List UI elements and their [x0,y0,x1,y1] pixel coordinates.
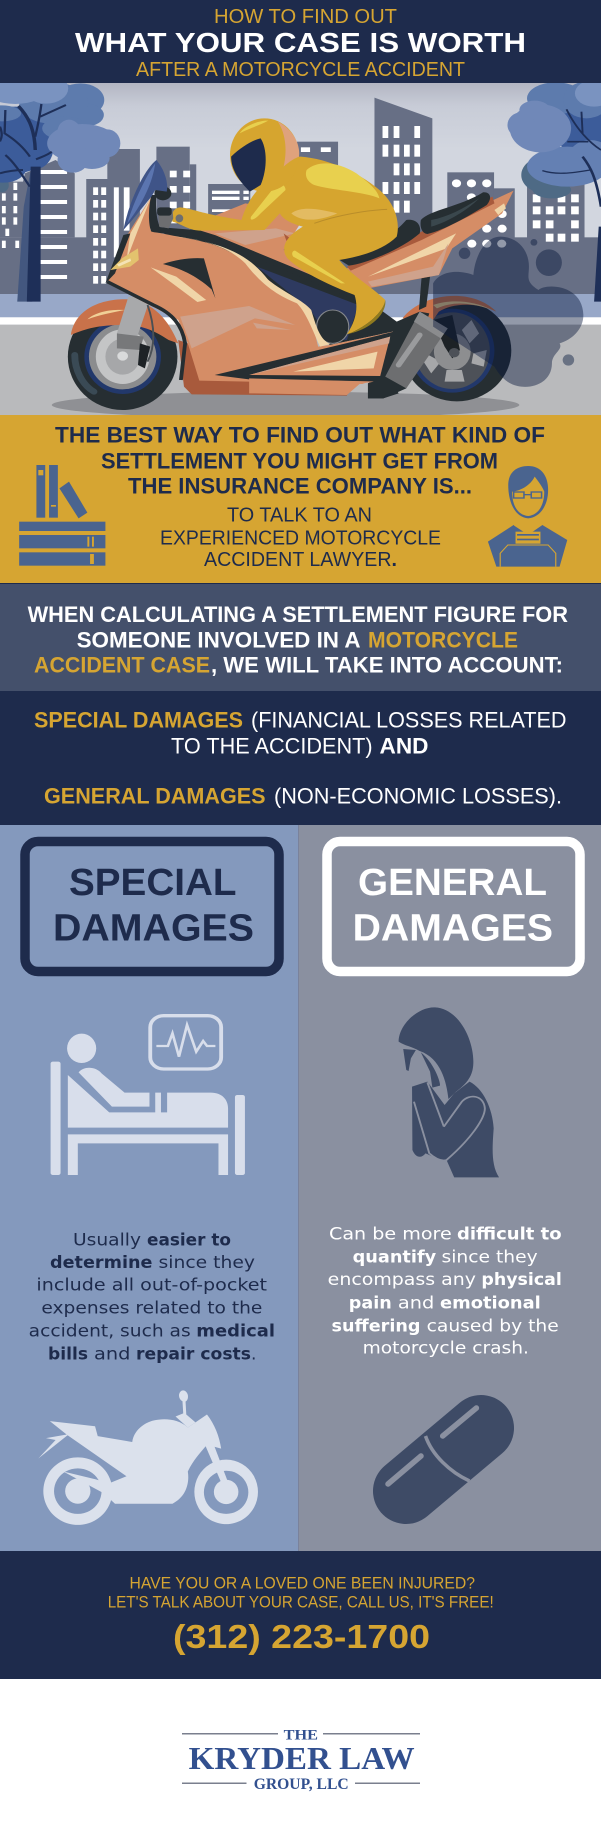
logo: The Kryder Law Group: THE [284,1727,318,1743]
special damages description: expenses related to the [41,1298,262,1318]
special damages description: Usually [73,1230,141,1250]
gold panel answer [160,504,441,571]
headlight [110,248,139,270]
settlement intro text: MOTORCYCLE [368,627,518,652]
street and sidewalk [0,294,601,415]
body highlight [180,306,295,348]
gold panel heading: THE INSURANCE COMPANY IS... [128,473,472,498]
general damages description: and [398,1293,434,1313]
general damages description: encompass any [328,1270,476,1290]
panel: best way to find out [0,415,601,584]
special damages description: include all out-of-pocket [36,1276,267,1296]
icon: books [19,465,105,566]
panel: header [0,0,601,83]
rider [172,118,398,334]
damages summary text: GENERAL DAMAGES [44,783,266,808]
special damages description: easier to [147,1230,231,1250]
general damages description: emotional [440,1293,541,1313]
logo: The Kryder Law Group [182,1727,420,1793]
icon: lawyer [488,466,567,567]
general damages description: motorcycle crash. [363,1339,529,1359]
gold panel heading: THE BEST WAY TO FIND OUT WHAT KIND OF [55,423,545,448]
tree right [507,80,601,302]
rear wheel [412,304,512,402]
special damages description: accident, such as [29,1321,191,1341]
gold panel heading [55,423,545,498]
panel: motorcycle hero illustration [0,73,601,418]
gold panel heading: SETTLEMENT YOU MIGHT GET FROM [101,448,498,473]
engine dark area [153,227,429,398]
gold panel answer: EXPERIENCED MOTORCYCLE [160,526,441,549]
front wheel [68,325,178,410]
general damages heading box: DAMAGES [353,908,553,950]
icon: motorcycle silhouette [38,1390,258,1525]
panel: special damages [0,825,298,1551]
settlement intro text: WHEN CALCULATING A SETTLEMENT FIGURE FOR [28,602,568,627]
smoke puffs [459,239,574,366]
special damages description [29,1230,275,1364]
settlement intro text [28,602,568,677]
damages summary text: (FINANCIAL LOSSES RELATED [251,707,566,732]
general damages description: since they [442,1247,538,1267]
settlement intro text: ACCIDENT CASE [34,652,210,677]
icon: crying person [399,1007,499,1177]
tank [200,203,312,276]
fairing body [105,195,394,396]
settlement intro text: SOMEONE INVOLVED IN A [77,627,361,652]
general damages description: caused by the [427,1317,559,1337]
panel: settlement intro [0,584,601,691]
header kicker: HOW TO FIND OUT [214,6,397,28]
general damages description [328,1225,562,1359]
special damages heading box: DAMAGES [53,908,254,950]
panel: general damages [298,825,601,1551]
rear fender [402,296,496,320]
lower dark panel [215,332,394,382]
call to action text [108,1575,494,1611]
phone number: (312) 223-1700 [173,1618,430,1655]
special damages description: and [94,1344,130,1364]
damages summary text: TO THE ACCIDENT) [171,733,373,758]
city skyline [0,98,601,294]
general damages description: suffering [332,1317,420,1337]
special damages heading box [25,842,279,972]
panel: damages summary [0,691,601,825]
front fender [71,299,178,343]
gold panel answer: TO TALK TO AN [227,504,372,527]
general damages description: pain [349,1293,392,1313]
damages summary text [34,707,566,808]
gold panel answer: ACCIDENT LAWYER. [204,548,397,571]
exhaust [368,312,448,398]
special damages description: medical [196,1321,275,1341]
side vent [163,258,215,298]
logo: The Kryder Law Group: GROUP, LLC [254,1776,349,1793]
general damages description: quantify [353,1247,436,1267]
icon: hospital bed [51,1016,245,1175]
motorcycle [52,118,519,418]
fairing dark outline [107,282,185,380]
special damages heading box: SPECIAL [69,862,237,904]
swingarm strut [419,277,430,310]
cream stripe [169,236,330,347]
helmet [230,118,299,192]
logo: The Kryder Law Group: KRYDER LAW [189,1740,415,1776]
damages summary text: SPECIAL DAMAGES [34,707,243,732]
ground shadow [52,392,520,415]
rider suit [172,157,398,334]
panel: call to action [0,1551,601,1679]
damages summary text: AND [380,733,428,758]
special damages description: since they [158,1253,255,1273]
general damages heading box [327,842,580,972]
seats [337,192,490,266]
tree left [0,73,120,302]
general damages heading box: GENERAL [358,862,547,904]
general damages description: difficult to [457,1225,562,1245]
damages summary text: (NON-ECONOMIC LOSSES). [274,783,562,808]
header subtitle: AFTER A MOTORCYCLE ACCIDENT [136,59,465,81]
special damages description: repair costs [136,1344,251,1364]
settlement intro text: , WE WILL TAKE INTO ACCOUNT: [211,652,563,677]
tail section [347,191,514,288]
special damages description: determine [50,1253,152,1273]
front fork [117,297,153,368]
general damages description: Can be more [329,1225,452,1245]
icon: pill capsule [388,1408,481,1491]
handlebar and mirror [154,186,173,228]
special damages description: . [251,1344,256,1364]
title: WHAT YOUR CASE IS WORTH [75,27,526,58]
windscreen [123,160,167,230]
special damages description: bills [48,1344,88,1364]
exhaust smoke [433,237,583,387]
general damages description: physical [481,1270,562,1290]
call to action text: LET'S TALK ABOUT YOUR CASE, CALL US, IT'S FREE! [108,1593,494,1611]
call to action text: HAVE YOU OR A LOVED ONE BEEN INJURED? [130,1575,475,1593]
